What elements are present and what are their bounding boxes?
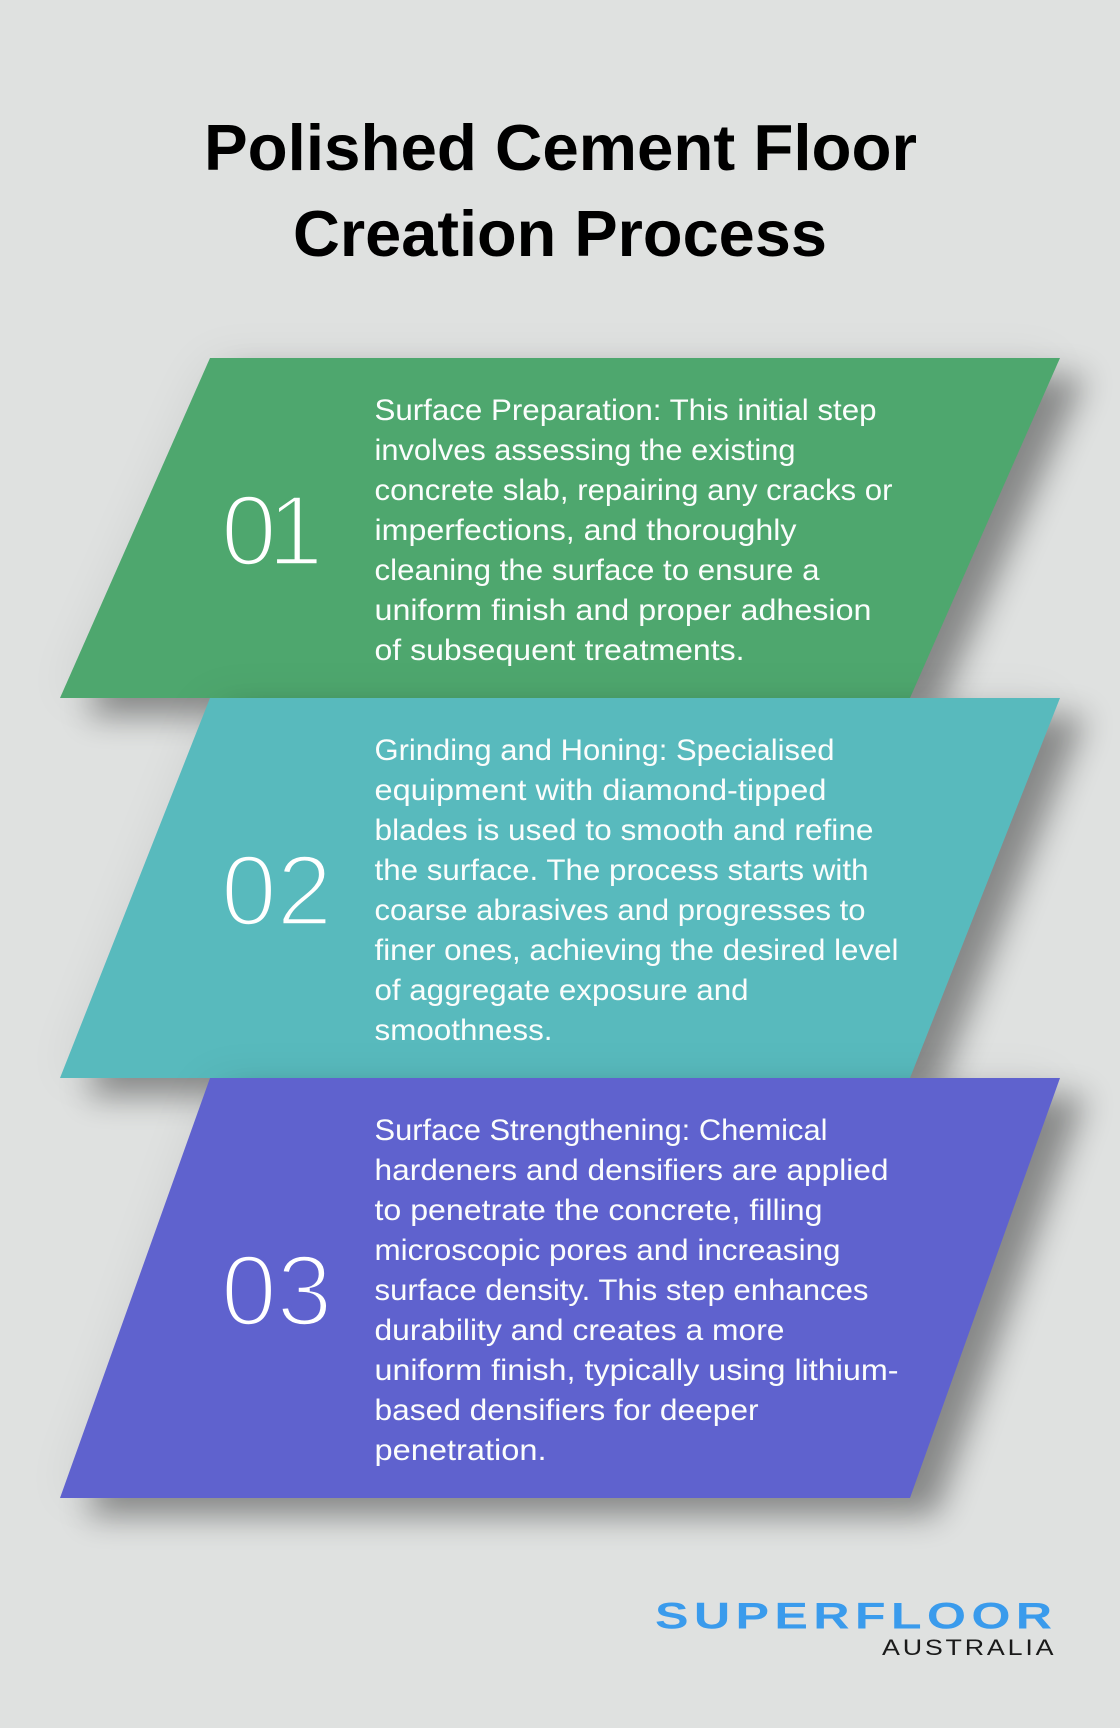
step 02 text: the surface. The process starts with (374, 854, 868, 887)
step 01 text: cleaning the surface to ensure a (374, 554, 820, 587)
step 02 text: of aggregate exposure and (374, 974, 748, 1007)
step number 01: 01 (221, 475, 319, 587)
step 03 text: uniform finish, typically using lithium- (374, 1354, 898, 1387)
step number 02: 02 (221, 835, 332, 947)
step 02 text: Grinding and Honing: Specialised (374, 734, 834, 767)
step 01 text: uniform finish and proper adhesion (374, 594, 872, 627)
title: Polished Cement Floor (204, 111, 917, 184)
title (204, 111, 917, 270)
step 02 text (374, 734, 898, 1047)
step 01 text: Surface Preparation: This initial step (374, 394, 876, 427)
panel shape: teal parallelogram (60, 698, 1060, 1078)
step 03 text: microscopic pores and increasing (374, 1234, 840, 1267)
step 03 text: durability and creates a more (374, 1314, 784, 1347)
panel shape: purple parallelogram (60, 1078, 1060, 1498)
panel shape: green parallelogram (60, 358, 1060, 698)
step 03 text: penetration. (374, 1434, 546, 1467)
panel: step 01 (60, 358, 1060, 698)
step 01 text: involves assessing the existing (374, 434, 796, 467)
step 03 text (374, 1114, 898, 1467)
step 03 text: surface density. This step enhances (374, 1274, 868, 1307)
step 03 text: based densifiers for deeper (374, 1394, 759, 1427)
step number 03: 03 (221, 1235, 332, 1347)
step 01 text: imperfections, and thoroughly (374, 514, 796, 547)
step 01 text: concrete slab, repairing any cracks or (374, 474, 893, 507)
step 02 text: smoothness. (374, 1014, 552, 1047)
logo: Superfloor Australia (655, 1596, 1057, 1660)
step 02 text: finer ones, achieving the desired level (374, 934, 898, 967)
step 02 text: blades is used to smooth and refine (374, 814, 874, 847)
step 03 text: hardeners and densifiers are applied (374, 1154, 888, 1187)
step 03 text: to penetrate the concrete, filling (374, 1194, 822, 1227)
step 02 text: equipment with diamond-tipped (374, 774, 826, 807)
panel: step 03 (60, 1078, 1060, 1498)
step 03 text: Surface Strengthening: Chemical (374, 1114, 828, 1147)
step 01 text: of subsequent treatments. (374, 634, 744, 667)
title: Creation Process (293, 197, 827, 270)
step 02 text: coarse abrasives and progresses to (374, 894, 866, 927)
step 01 text (374, 394, 893, 667)
logo: Superfloor Australia: SUPERFLOOR (655, 1596, 1057, 1637)
logo: Superfloor Australia: AUSTRALIA (882, 1636, 1056, 1660)
panel: step 02 (60, 698, 1060, 1078)
